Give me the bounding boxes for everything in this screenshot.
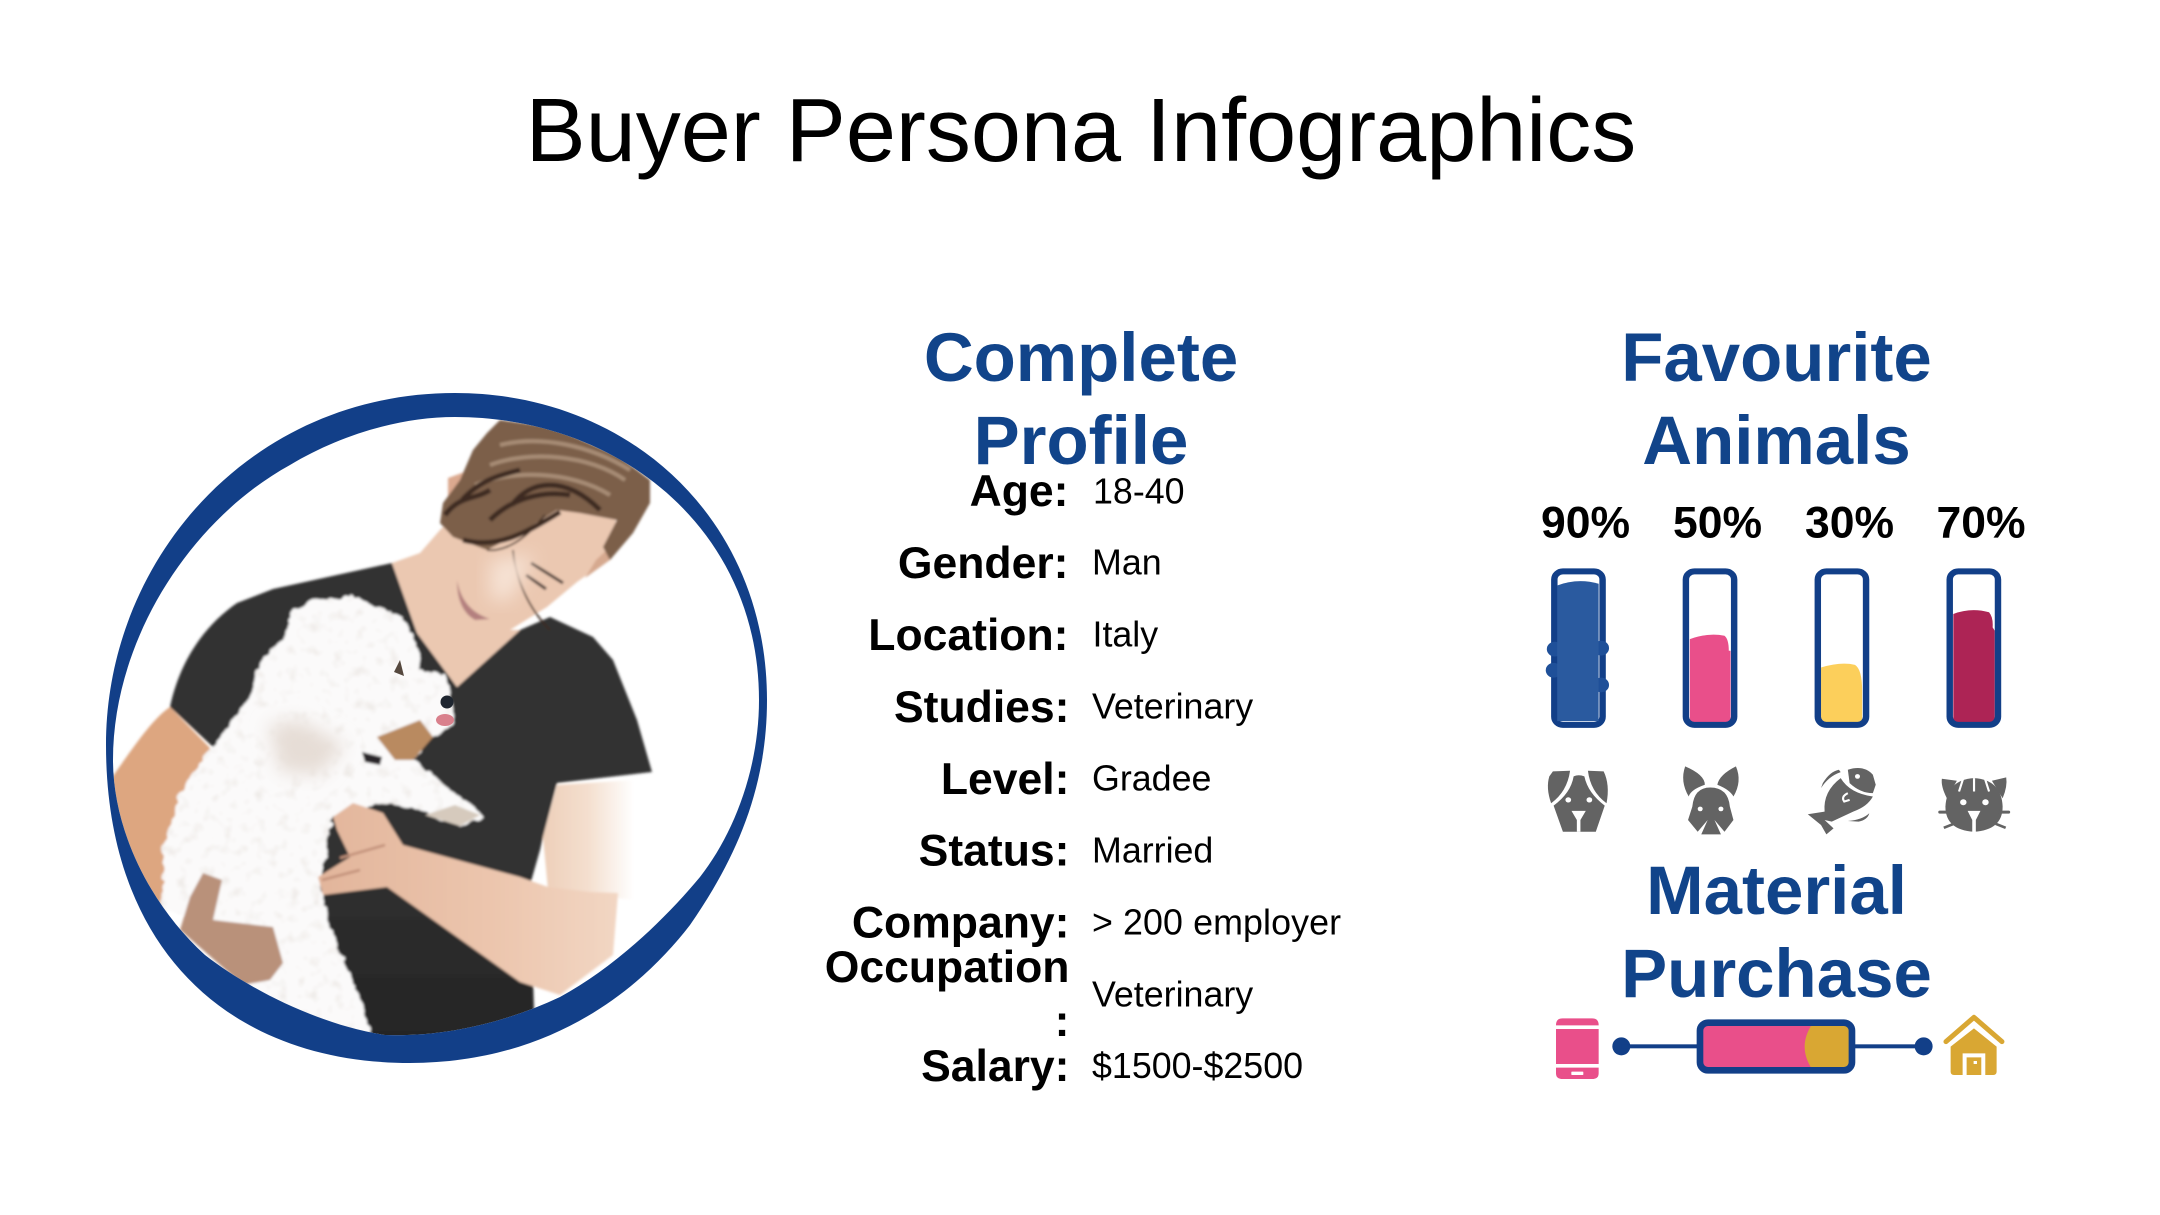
row: status: Married: [1092, 830, 1213, 870]
icon: dog: [1548, 771, 1608, 832]
profile table: [825, 467, 1341, 1091]
gauge: cat 50%: [1686, 571, 1734, 725]
row: gender: Gender:: [898, 539, 1068, 588]
row: salary: $1500-$2500: [1092, 1046, 1303, 1086]
heading: complete profile: Profile: [974, 402, 1188, 479]
row: occupation: :: [1055, 997, 1070, 1046]
row: company: [852, 898, 1341, 948]
gauge: fish 30%: [1818, 571, 1866, 725]
row: status: [919, 826, 1213, 876]
heading: material purchase: Material: [1646, 852, 1907, 929]
row: age: 18-40: [1093, 472, 1185, 512]
row: salary: [921, 1042, 1303, 1091]
row: location: [868, 611, 1158, 660]
icon: mobile phone: [1556, 1018, 1599, 1079]
percentage labels: [1541, 498, 2026, 548]
row: gender: [898, 539, 1162, 588]
row: location: Italy: [1092, 614, 1158, 654]
row: level: Level:: [941, 755, 1070, 804]
percentage labels: 90%: [1541, 498, 1630, 548]
title: Buyer Persona Infographics: [526, 81, 1636, 181]
photo: man holding white dog in a blue circle: [106, 393, 767, 1063]
row: occupation: Veterinary: [1092, 974, 1253, 1014]
row: studies: Veterinary: [1092, 686, 1253, 726]
heading: material purchase: Purchase: [1621, 935, 1932, 1012]
heading: favourite animals: Animals: [1642, 402, 1911, 479]
connector line: [1612, 1037, 1933, 1055]
heading: favourite animals: Favourite: [1621, 319, 1932, 396]
percentage labels: 70%: [1936, 498, 2026, 548]
row: level: Gradee: [1092, 758, 1211, 798]
animal preference gauges: [1546, 571, 2010, 834]
icon: fish: [1808, 768, 1876, 834]
gauge: mouse 70%: [1950, 571, 1998, 725]
row: age: Age:: [970, 467, 1068, 516]
blue ring: [106, 393, 767, 1063]
row: studies: [894, 683, 1253, 732]
percentage labels: 50%: [1673, 498, 1762, 548]
percentage labels: 30%: [1805, 498, 1894, 548]
row: level: [941, 755, 1211, 804]
row: age: [970, 467, 1185, 516]
icon: rabbit-eared cat: [1683, 766, 1739, 834]
row: salary: Salary:: [921, 1042, 1070, 1091]
row: company: Company:: [852, 898, 1070, 948]
row: studies: Studies:: [894, 683, 1070, 732]
row: gender: Man: [1092, 542, 1162, 582]
row: status: Status:: [919, 826, 1070, 876]
purchase channel slider: [1556, 1017, 2002, 1079]
icon: house: [1946, 1017, 2002, 1075]
row: occupation: [825, 943, 1253, 1046]
icon: mouse: [1938, 777, 2010, 832]
gauge: dog 90%: [1546, 571, 1609, 725]
row: location: Location:: [868, 611, 1068, 660]
row: company: > 200 employer: [1092, 902, 1341, 942]
photo: man and dog: [110, 420, 652, 1040]
row: occupation: Occupation: [825, 943, 1070, 992]
heading: complete profile: Complete: [924, 319, 1238, 396]
split bar: mobile vs home: [1700, 1023, 1852, 1070]
